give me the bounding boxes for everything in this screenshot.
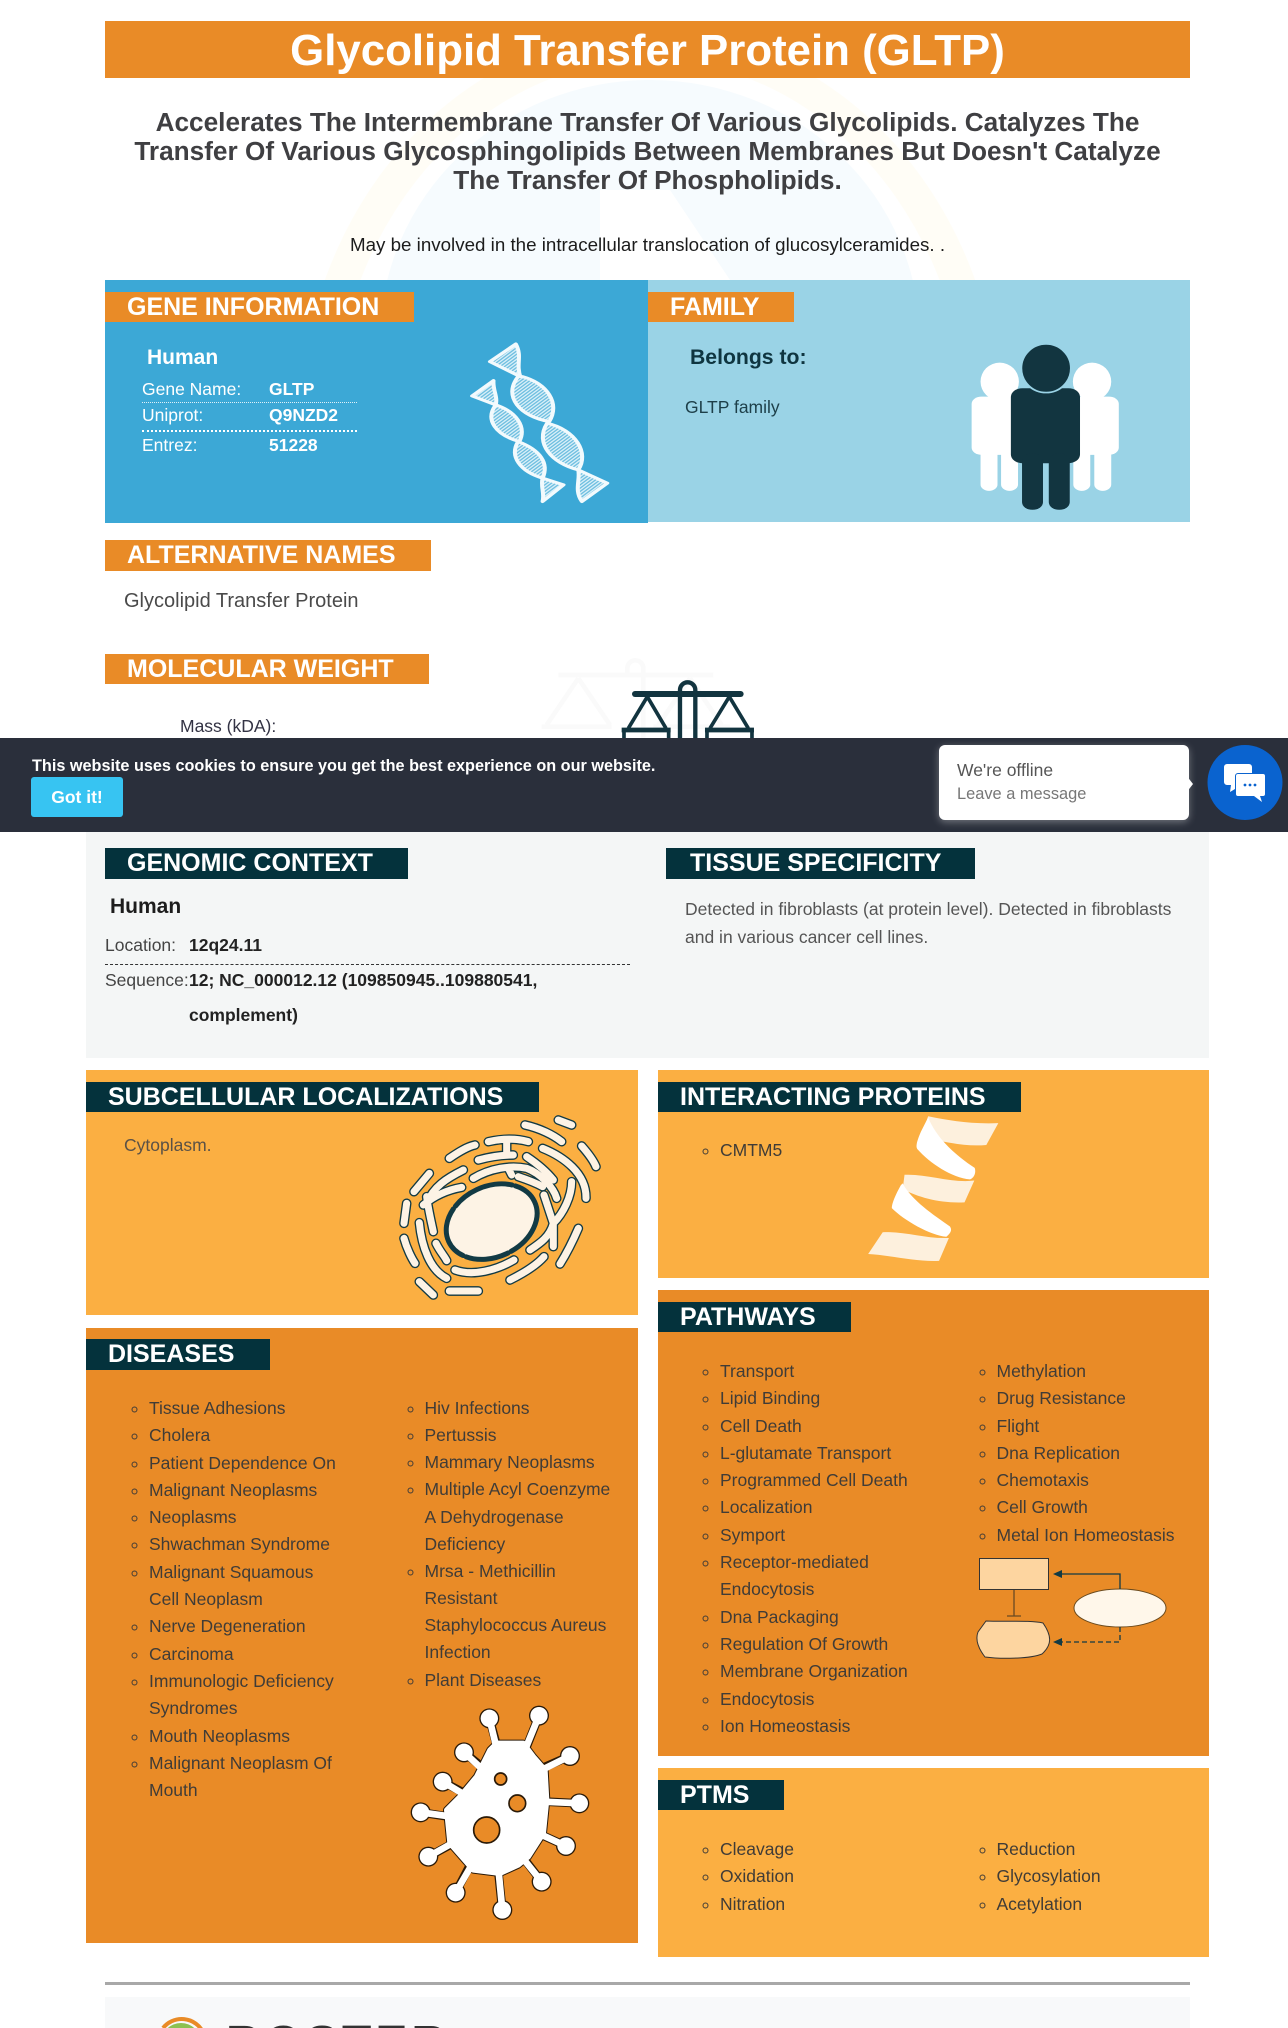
pathway list column 2 <box>980 1361 1174 1545</box>
heading: alternative names: ALTERNATIVE NAMES <box>127 541 396 569</box>
ptm list column 2: Reduction <box>996 1839 1075 1859</box>
disease list column 1: Mouth Neoplasms <box>149 1726 290 1746</box>
disease list column 1: Cholera <box>149 1425 210 1445</box>
pathway list column 2: Metal Ion Homeostasis <box>996 1525 1174 1545</box>
disease list column 1: Malignant Neoplasm Of <box>149 1753 332 1773</box>
ptm list column 1: Cleavage <box>720 1839 794 1859</box>
entrez row: Entrez: <box>142 435 197 455</box>
disease list column 2: Pertussis <box>424 1425 496 1445</box>
ptm list column 1: Oxidation <box>720 1866 794 1886</box>
heading: family: FAMILY <box>670 293 759 321</box>
chat pointer <box>1186 775 1193 793</box>
icon: people <box>972 344 1119 510</box>
pathway list column 1: Localization <box>720 1497 812 1517</box>
ptm list column 2 <box>980 1839 1101 1914</box>
localization text: Cytoplasm. <box>124 1135 212 1155</box>
disease list column 2: Hiv Infections <box>424 1398 530 1418</box>
pathway list column 1: Lipid Binding <box>720 1388 820 1408</box>
got it button: Got it! <box>51 787 103 807</box>
disease list column 1: Shwachman Syndrome <box>149 1534 330 1554</box>
icon: organelle <box>399 1115 601 1300</box>
panel: pathways <box>658 1290 1209 1756</box>
chat offline: We're offline <box>957 760 1053 780</box>
icon: helix <box>868 1116 998 1261</box>
dashed divider <box>105 964 630 965</box>
gene name row <box>142 379 314 399</box>
sequence row: Sequence: <box>105 970 189 990</box>
ptm list column 1 <box>702 1839 794 1914</box>
panel: genomic context and tissue specificity: 12; NC_000012.12 (109850945..109880541, <box>189 970 537 990</box>
icon: logo <box>162 2017 203 2028</box>
heading: diseases: DISEASES <box>108 1340 234 1368</box>
entrez row <box>142 435 318 455</box>
mass label: Mass (kDA): <box>180 716 276 736</box>
location row: Location: <box>105 935 176 955</box>
heading: family <box>648 292 794 322</box>
chat leave message: Leave a message <box>957 785 1086 803</box>
heading: gene information: GENE INFORMATION <box>127 293 379 321</box>
disease list column 2: Resistant <box>424 1588 497 1608</box>
icon: chat button <box>1208 745 1282 820</box>
disease list column 2: Plant Diseases <box>424 1670 541 1690</box>
disease list column 2: Mammary Neoplasms <box>424 1452 595 1472</box>
pathway list column 1: Endocytosis <box>720 1689 814 1709</box>
sequence row <box>105 970 537 990</box>
panel: diseases <box>86 1328 638 1943</box>
species: Human <box>147 346 218 369</box>
pathway list column 1: Regulation Of Growth <box>720 1634 888 1654</box>
heading: ptms: PTMS <box>680 1781 749 1809</box>
pathway list column 2: Dna Replication <box>996 1443 1120 1463</box>
function note: May be involved in the intracellular translocation of glucosylceramides. . <box>350 234 945 255</box>
ptm list column 2: Acetylation <box>996 1894 1082 1914</box>
location row <box>105 935 262 955</box>
subtitle: The Transfer Of Phospholipids. <box>453 165 842 195</box>
gene name row: Gene Name: <box>142 379 241 399</box>
icon: dna <box>470 342 610 504</box>
panel: interacting proteins <box>658 1070 1209 1278</box>
panel: genomic context and tissue specificity: 12q24.11 <box>189 935 262 955</box>
disease list column 1 <box>132 1398 336 1800</box>
title: Glycolipid Transfer Protein (GLTP) <box>290 26 1005 75</box>
pathway list column 2: Methylation <box>996 1361 1086 1381</box>
disease list column 2 <box>408 1398 610 1690</box>
heading: ptms <box>658 1780 784 1810</box>
disease list column 1: Tissue Adhesions <box>149 1398 286 1418</box>
gene name row: GLTP <box>269 379 314 399</box>
disease list column 1: Malignant Neoplasms <box>149 1480 317 1500</box>
disease list column 1: Cell Neoplasm <box>149 1589 263 1609</box>
panel: ptms <box>658 1768 1209 1957</box>
panel: subcellular localizations <box>86 1070 638 1315</box>
footer panel <box>105 1997 1190 2028</box>
disease list column 1: Immunologic Deficiency <box>149 1671 334 1691</box>
panel: gene information <box>105 280 648 523</box>
title <box>105 21 1190 78</box>
chat popup <box>939 745 1189 820</box>
belongs to: Belongs to: <box>690 346 807 369</box>
tissue text <box>685 899 1171 946</box>
pathway list column 1: Receptor-mediated <box>720 1552 869 1572</box>
heading: interacting proteins: INTERACTING PROTEINS <box>680 1083 986 1111</box>
icon: scales <box>622 680 754 738</box>
subtitle <box>134 107 1161 195</box>
pathway list column 1: Membrane Organization <box>720 1661 908 1681</box>
ptm list column 2: Glycosylation <box>996 1866 1101 1886</box>
ptm list column 1: Nitration <box>720 1894 785 1914</box>
disease list column 1: Neoplasms <box>149 1507 237 1527</box>
pathway list column 1: Transport <box>720 1361 794 1381</box>
heading: molecular weight: MOLECULAR WEIGHT <box>127 655 394 683</box>
protein list: CMTM5 <box>720 1140 782 1160</box>
panel: gene information: 51228 <box>269 435 318 455</box>
uniprot row <box>142 402 357 432</box>
heading: tissue specificity: TISSUE SPECIFICITY <box>690 849 941 877</box>
uniprot row: Uniprot: <box>142 405 203 425</box>
heading: genomic context: GENOMIC CONTEXT <box>127 849 373 877</box>
heading: pathways <box>658 1302 851 1332</box>
disease list column 2: Staphylococcus Aureus <box>424 1615 606 1635</box>
disease list column 1: Patient Dependence On <box>149 1453 336 1473</box>
species: Human <box>110 895 181 918</box>
tissue text: Detected in fibroblasts (at protein level). Detected in fibroblasts <box>685 899 1171 919</box>
pathway list column 2: Chemotaxis <box>996 1470 1089 1490</box>
pathway list column 1: Ion Homeostasis <box>720 1716 850 1736</box>
disease list column 1: Mouth <box>149 1780 198 1800</box>
footer divider <box>105 1982 1190 1985</box>
disease list column 2: Mrsa - Methicillin <box>424 1561 556 1581</box>
tissue text: and in various cancer cell lines. <box>685 926 928 946</box>
disease list column 1: Malignant Squamous <box>149 1562 313 1582</box>
pathway list column 1 <box>702 1361 908 1736</box>
pathway list column 1: Symport <box>720 1525 785 1545</box>
pathway list column 1: Cell Death <box>720 1416 802 1436</box>
pathway list column 2: Flight <box>996 1416 1039 1436</box>
pathway list column 2: Drug Resistance <box>996 1388 1126 1408</box>
panel: genomic context and tissue specificity <box>86 832 1209 1058</box>
got it button <box>31 777 123 817</box>
heading: pathways: PATHWAYS <box>680 1303 816 1331</box>
cookie text: This website uses cookies to ensure you get the best experience on our website. <box>32 757 655 775</box>
pathway list column 1: L-glutamate Transport <box>720 1443 891 1463</box>
cookie banner <box>0 738 1288 832</box>
disease list column 2: Infection <box>424 1642 491 1662</box>
alternative name text: Glycolipid Transfer Protein <box>124 590 359 612</box>
watermark logo <box>325 78 975 280</box>
pathway list column 1: Endocytosis <box>720 1579 814 1599</box>
subtitle: Transfer Of Various Glycosphingolipids Between Membranes But Doesn't Catalyze <box>134 136 1161 166</box>
panel: family <box>648 280 1190 522</box>
pathway list column 2: Cell Growth <box>996 1497 1088 1517</box>
uniprot row: Q9NZD2 <box>269 405 338 425</box>
family name: GLTP family <box>685 397 780 417</box>
disease list column 1: Nerve Degeneration <box>149 1616 306 1636</box>
sequence row continued: complement) <box>189 1005 298 1025</box>
subtitle: Accelerates The Intermembrane Transfer Of Various Glycolipids. Catalyzes The <box>156 107 1139 137</box>
disease list column 1: Carcinoma <box>149 1644 234 1664</box>
heading: diseases <box>86 1339 270 1370</box>
heading: subcellular localizations: SUBCELLULAR LOCALIZATIONS <box>108 1083 503 1111</box>
disease list column 2: Deficiency <box>424 1534 505 1554</box>
pathway list column 1: Programmed Cell Death <box>720 1470 908 1490</box>
pathway list column 1: Dna Packaging <box>720 1607 839 1627</box>
disease list column 1: Syndromes <box>149 1698 238 1718</box>
disease list column 2: Multiple Acyl Coenzyme <box>424 1479 610 1499</box>
disease list column 2: A Dehydrogenase <box>424 1507 564 1527</box>
